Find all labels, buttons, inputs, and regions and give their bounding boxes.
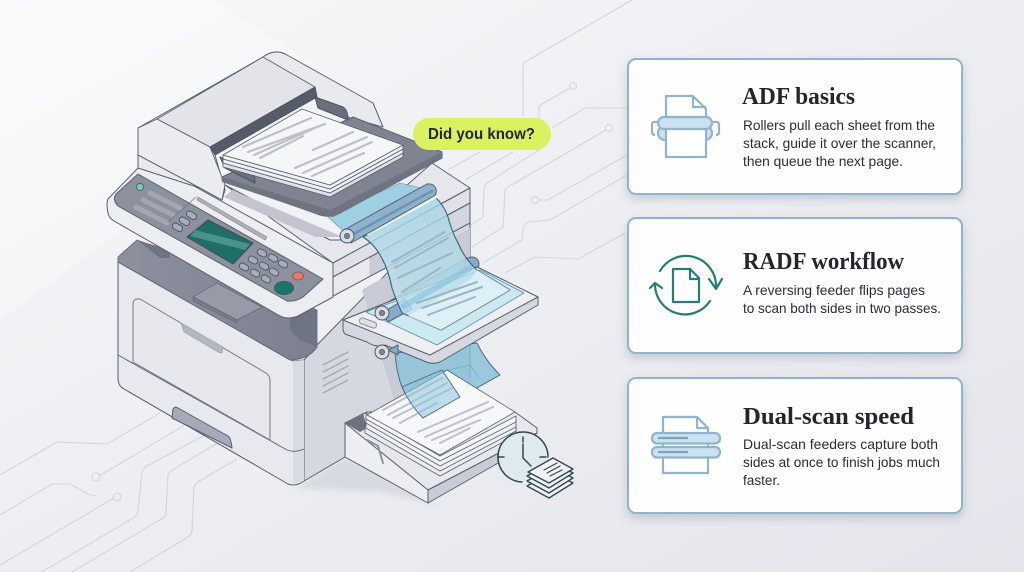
paper guide front [220, 157, 255, 183]
upper deck band [225, 163, 470, 318]
roller cap lower left [375, 299, 412, 359]
document stack [223, 109, 403, 197]
blue sheet under tray [327, 183, 430, 237]
feed tray [343, 267, 538, 363]
description: sides at once to finish jobs much [743, 454, 940, 470]
icon: mini stack [527, 458, 573, 498]
heading: Dual-scan speed [743, 404, 915, 430]
curved blue sheet [363, 196, 510, 330]
heading: RADF workflow [743, 249, 905, 275]
description [743, 117, 936, 169]
description: stack, guide it over the scanner, [743, 135, 936, 151]
heading: ADF basics [742, 84, 855, 110]
icon: clock [498, 432, 548, 482]
lower blue sheet [395, 343, 500, 418]
printer front body [118, 262, 304, 485]
display slots [136, 193, 180, 223]
printer illustration [107, 52, 573, 503]
printer side wall [304, 188, 470, 481]
control panel deck [107, 155, 333, 318]
icon: page between rollers [652, 96, 719, 157]
roller 2 [377, 257, 479, 319]
scanner lid [138, 52, 383, 240]
paper cavity [118, 240, 317, 360]
lower tray handle [172, 407, 232, 448]
callout: did you know: Did you know? [428, 126, 535, 143]
input tray [220, 97, 442, 217]
roller 1 [340, 184, 436, 243]
panel: ADF basics [628, 59, 962, 194]
floor shadow [295, 457, 440, 505]
description: Rollers pull each sheet from the [743, 117, 935, 133]
buttons [171, 210, 198, 233]
description: A reversing feeder flips pages [743, 282, 925, 298]
output paper stack [365, 370, 516, 476]
blue sheet overlay on stack [402, 370, 460, 418]
start button [274, 282, 294, 294]
description: then queue the next page. [743, 153, 903, 169]
icon: page with cycle arrows [650, 256, 722, 314]
indicator light [136, 183, 144, 191]
panel: RADF workflow [628, 218, 962, 353]
description: to scan both sides in two passes. [743, 300, 941, 316]
description: faster. [743, 472, 780, 488]
stop button [292, 272, 304, 280]
keypad [238, 248, 289, 284]
panel: Dual-scan speed [628, 378, 962, 513]
paper guide back [315, 97, 348, 120]
description [743, 436, 940, 488]
output flap [193, 283, 262, 323]
output tray [345, 412, 537, 503]
icon: page with dual scan bars [652, 417, 720, 473]
circuit lines [0, 0, 632, 572]
callout: did you know [413, 118, 551, 150]
description: Dual-scan feeders capture both [743, 436, 938, 452]
screen [187, 220, 253, 264]
front door [133, 299, 270, 440]
description [743, 282, 941, 316]
